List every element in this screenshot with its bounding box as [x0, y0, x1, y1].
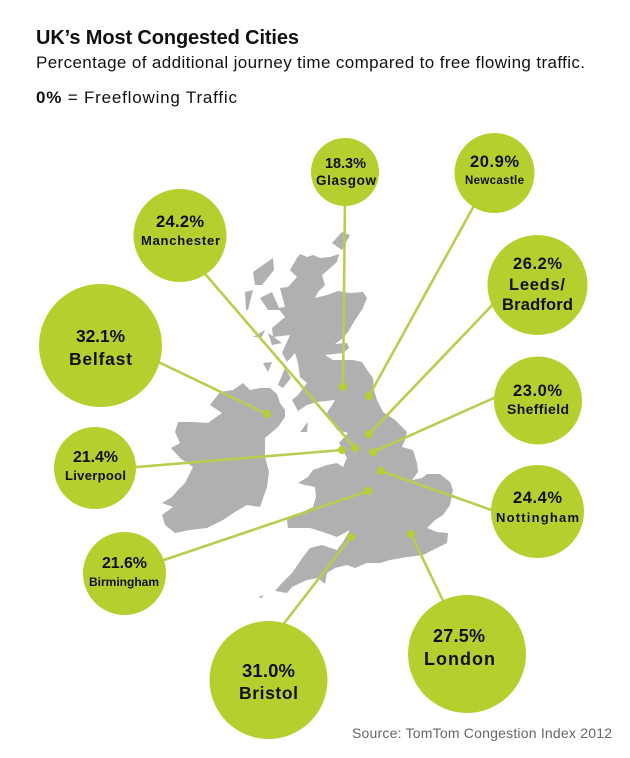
bubble: Manchester: 24.2%	[156, 213, 204, 231]
map: Great Britain	[272, 254, 453, 593]
bubble: Bristol: 31.0%	[242, 660, 295, 681]
map of UK and Ireland	[162, 232, 453, 598]
bubble: Newcastle: Newcastle	[465, 175, 524, 187]
connector dots	[263, 383, 415, 541]
bubble: Sheffield	[494, 356, 582, 444]
bubble: London: London	[424, 649, 495, 669]
bubble: Belfast: 32.1%	[76, 326, 125, 346]
bubble: Glasgow: 18.3%	[325, 156, 366, 172]
bubble: Leeds/Bradford: Bradford	[502, 296, 573, 314]
bubble: Manchester	[134, 189, 226, 282]
bubble: Belfast: Belfast	[69, 349, 132, 369]
bubble: Liverpool: 21.4%	[73, 449, 118, 466]
subtitle: Percentage of additional journey time compared to free flowing traffic.	[36, 53, 585, 72]
bubble: Nottingham	[491, 465, 584, 558]
bubble: Newcastle: 20.9%	[470, 153, 519, 171]
title: UK’s Most Congested Cities	[36, 27, 299, 49]
source note: Source: TomTom Congestion Index 2012	[352, 725, 612, 741]
bubble: Nottingham: 24.4%	[513, 489, 562, 507]
bubble: Leeds/Bradford	[488, 235, 588, 335]
bubble: London: 27.5%	[433, 626, 485, 646]
map: Man and Scilly	[258, 422, 308, 598]
bubble: Birmingham: Birmingham	[89, 575, 159, 589]
bubble: Newcastle	[454, 133, 534, 213]
bubble: Belfast	[39, 284, 162, 407]
bubble: Manchester: Manchester	[141, 233, 220, 248]
bubble: Sheffield: 23.0%	[513, 382, 562, 400]
bubble: London	[408, 595, 526, 713]
bubble: Leeds/Bradford: Leeds/	[509, 276, 565, 294]
bubble: Nottingham: Nottingham	[496, 510, 579, 525]
bubble: Liverpool	[54, 427, 136, 509]
bubble: Bristol: Bristol	[239, 683, 298, 703]
legend: freeflowing traffic: 0% = Freeflowing Traffic	[36, 88, 238, 107]
bubble: Bristol	[210, 621, 328, 739]
bubble: Sheffield: Sheffield	[507, 401, 569, 417]
map: Scottish islands	[245, 232, 350, 388]
bubble: Glasgow: Glasgow	[316, 173, 376, 188]
bubble: Birmingham: 21.6%	[102, 555, 147, 572]
bubble: Birmingham	[83, 532, 166, 615]
bubble: Leeds/Bradford: 26.2%	[513, 255, 562, 273]
bubble: Liverpool: Liverpool	[65, 468, 126, 483]
bubble: Glasgow	[311, 138, 379, 206]
connector lines	[125, 200, 505, 635]
map: Ireland	[162, 383, 285, 533]
